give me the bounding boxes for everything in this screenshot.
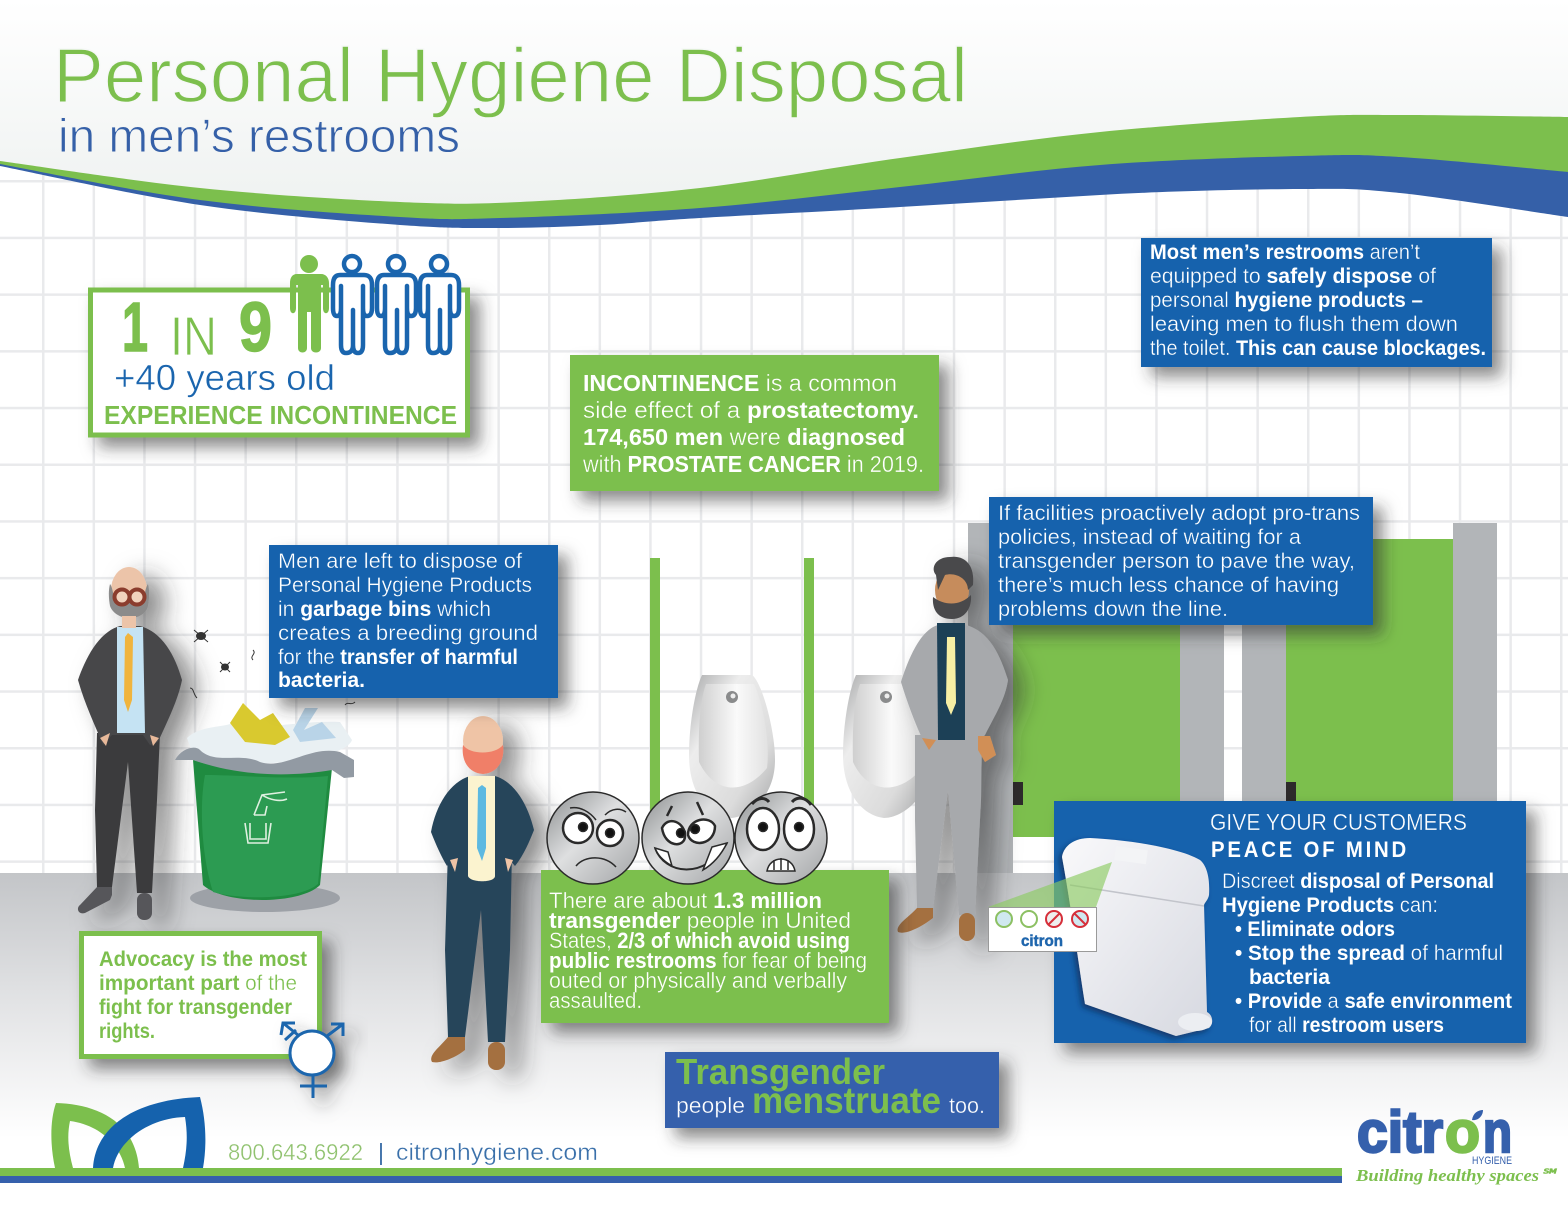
- panel: incontinence facts: with PROSTATE CANCER in 2019.: [582, 451, 924, 477]
- panel: 1 in 9 statistic: IN: [170, 305, 217, 367]
- man in grey suit: [898, 557, 1008, 941]
- icon: hand disposing: [245, 792, 287, 843]
- panel: incontinence facts: 174,650 men were diagnosed: [583, 424, 905, 450]
- panel: restrooms not equipped: equipped to safely dispose of: [1150, 265, 1436, 288]
- panel: give your customers peace of mind: • Provide a safe environment: [1235, 990, 1512, 1013]
- dispenser label: citron: [1021, 933, 1063, 950]
- panel: incontinence facts: [570, 355, 939, 491]
- panel: advocacy: [82, 934, 320, 1056]
- panel: give your customers peace of mind: • Stop the spread of harmful: [1235, 942, 1503, 965]
- man with glasses: [78, 567, 182, 920]
- subtitle: in men’s restrooms: [58, 109, 460, 162]
- citron hygiene logo: o: [1445, 1100, 1480, 1165]
- footer contact: 800.643.6922: [228, 1139, 363, 1165]
- panel: incontinence facts: side effect of a prostatectomy.: [583, 397, 919, 423]
- panel: transgender statistics: States, 2/3 of which avoid using: [549, 928, 850, 953]
- panel: transgender statistics: [541, 870, 889, 1023]
- panel: incontinence facts: INCONTINENCE is a common: [583, 370, 897, 396]
- panel: garbage bins: creates a breeding ground: [278, 622, 538, 645]
- faces: [547, 792, 827, 884]
- dispenser product: [1062, 838, 1212, 1036]
- panel: give your customers peace of mind: • Eliminate odors: [1235, 918, 1395, 941]
- urinal right: [843, 675, 930, 818]
- panel: give your customers peace of mind: Discreet disposal of Personal: [1222, 870, 1494, 893]
- panel: garbage bins: for the transfer of harmful: [278, 646, 518, 669]
- panel: pro-trans policies: transgender person to pave the way,: [998, 550, 1355, 573]
- urinal left: [689, 675, 775, 818]
- panel: give your customers peace of mind: Hygiene Products can:: [1222, 894, 1438, 917]
- panel: transgender people menstruate too: too.: [949, 1093, 985, 1118]
- panel: 1 in 9 statistic: +40 years old: [114, 357, 335, 398]
- icon: three outlined people: [333, 256, 459, 353]
- panel: garbage bins: Personal Hygiene Products: [278, 574, 532, 597]
- panel: advocacy: rights.: [99, 1020, 155, 1043]
- panel: garbage bins: [269, 545, 558, 698]
- panel: restrooms not equipped: personal hygiene products –: [1150, 289, 1423, 312]
- panel: give your customers peace of mind: PEACE OF MIND: [1211, 837, 1409, 862]
- panel: pro-trans policies: there’s much less chance of having: [998, 574, 1339, 597]
- panel: transgender people menstruate too: menstruate: [752, 1080, 941, 1121]
- panel: give your customers peace of mind: GIVE YOUR CUSTOMERS: [1210, 809, 1467, 835]
- icon: flies: [190, 630, 355, 705]
- urinal dividers: [650, 558, 814, 818]
- footer contact: citronhygiene.com: [396, 1139, 598, 1165]
- panel: garbage bins: in garbage bins which: [278, 598, 491, 621]
- citron hygiene logo: Building healthy spaces℠: [1355, 1166, 1558, 1185]
- panel: transgender statistics: There are about 1.3 million: [549, 888, 822, 913]
- panel: restrooms not equipped: Most men’s restrooms aren’t: [1150, 241, 1420, 264]
- citron hygiene logo: n: [1483, 1100, 1512, 1165]
- panel: transgender people menstruate too: people: [676, 1093, 745, 1118]
- citron hygiene logo: [1355, 1100, 1558, 1185]
- footer stripes: [0, 1168, 1342, 1183]
- citron hygiene logo: HYGIENE: [1472, 1155, 1512, 1167]
- dispenser label: [988, 908, 1096, 952]
- icon: scared face: [735, 792, 827, 884]
- footer contact: |: [378, 1139, 384, 1165]
- panel: restrooms not equipped: the toilet. This can cause blockages.: [1150, 337, 1486, 360]
- panel: give your customers peace of mind: [988, 801, 1526, 1043]
- icon: worried grin face: [642, 792, 734, 884]
- footer leaf logo: [51, 1097, 205, 1168]
- panel: 1 in 9 statistic: 1: [122, 288, 148, 366]
- label beam: [988, 862, 1112, 907]
- icon: transgender symbol: [281, 1023, 343, 1098]
- footer contact: [228, 1139, 598, 1165]
- trash bin with flies: [175, 630, 355, 912]
- title: Personal Hygiene Disposal: [53, 33, 968, 119]
- panel: restrooms not equipped: [1141, 238, 1492, 367]
- panel: pro-trans policies: problems down the line.: [998, 598, 1228, 621]
- panel: 1 in 9 statistic: EXPERIENCE INCONTINENCE: [104, 400, 457, 430]
- panel: transgender people menstruate too: Transgender: [676, 1051, 885, 1092]
- panel: transgender people menstruate too: [665, 1051, 999, 1128]
- panel: pro-trans policies: policies, instead of waiting for a: [998, 526, 1301, 549]
- panel: advocacy: important part of the: [99, 972, 297, 995]
- panel: restrooms not equipped: leaving men to flush them down: [1150, 313, 1458, 336]
- header band with wave: [0, 0, 1568, 228]
- restroom stalls: [968, 523, 1497, 873]
- panel: give your customers peace of mind: bacteria: [1249, 966, 1330, 989]
- panel: pro-trans policies: [989, 497, 1373, 625]
- panel: transgender statistics: assaulted.: [549, 988, 642, 1013]
- panel: transgender statistics: public restrooms for fear of being: [549, 948, 867, 973]
- man with red beard: [431, 716, 534, 1070]
- panel: 1 in 9 statistic: 9: [239, 288, 272, 366]
- icon: frowning face: [547, 792, 639, 884]
- panel: advocacy: Advocacy is the most: [99, 948, 307, 971]
- panel: advocacy: fight for transgender: [99, 996, 292, 1019]
- citron hygiene logo: citr: [1357, 1100, 1443, 1165]
- panel: garbage bins: Men are left to dispose of: [278, 550, 522, 573]
- panel: transgender statistics: transgender people in United: [549, 908, 851, 933]
- panel: pro-trans policies: If facilities proactively adopt pro-trans: [998, 502, 1360, 525]
- panel: 1 in 9 statistic: [90, 255, 468, 435]
- icon: green person: [290, 255, 329, 352]
- panel: garbage bins: bacteria.: [278, 669, 365, 692]
- panel: give your customers peace of mind: for all restroom users: [1249, 1014, 1444, 1037]
- panel: transgender statistics: outed or physically and verbally: [549, 968, 847, 993]
